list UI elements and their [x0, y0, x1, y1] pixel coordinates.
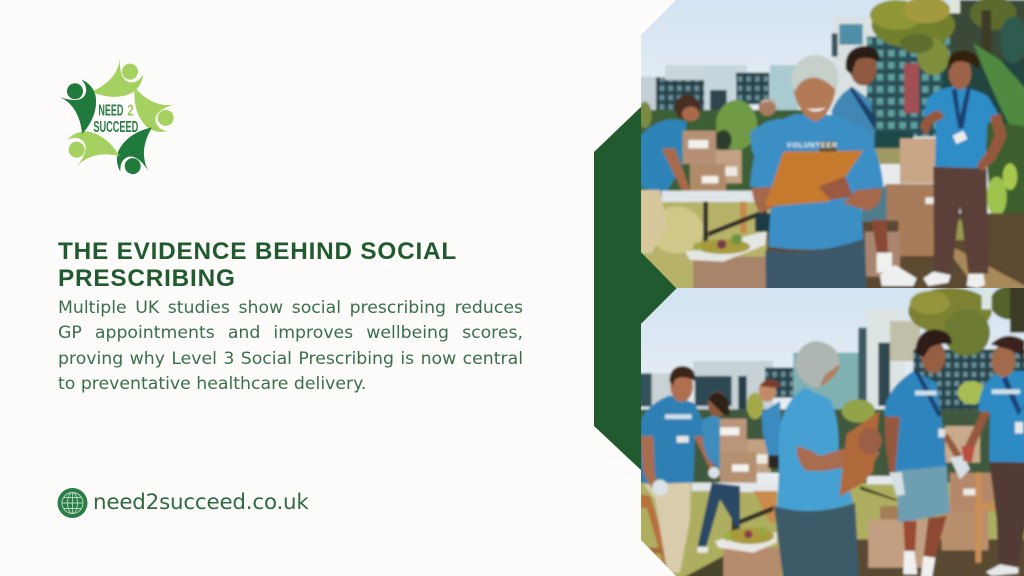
far right man — [978, 371, 1024, 463]
left man — [641, 395, 703, 484]
photo: volunteer with clipboard — [637, 0, 1024, 293]
logo: Need 2 Succeed — [50, 58, 182, 185]
logo wordmark: SUCCEED — [93, 119, 138, 136]
right man — [884, 371, 947, 473]
body text: proving why Level 3 Social Prescribing is now central — [58, 349, 523, 369]
title — [58, 238, 457, 292]
logo wordmark — [93, 103, 138, 136]
photo: volunteers talking at table — [637, 286, 1024, 576]
website url: need2succeed.co.uk — [93, 490, 309, 515]
body text: to preventative healthcare delivery. — [58, 374, 366, 394]
logo figure: lower left — [58, 121, 122, 183]
fruit box — [693, 257, 767, 293]
background worker — [750, 118, 780, 160]
main woman — [750, 114, 883, 250]
title: THE EVIDENCE BEHIND SOCIAL — [58, 238, 457, 265]
photo: volunteer with clipboard: VOLUNTEER — [787, 141, 838, 150]
right tables and boxes — [878, 162, 902, 170]
logo figure: left — [50, 74, 103, 136]
panel: green chevron shape — [594, 107, 677, 470]
girl background — [762, 401, 783, 456]
body text — [58, 298, 523, 394]
logo figure: bottom — [107, 123, 172, 185]
logo figure: top — [92, 58, 143, 97]
foliage — [908, 288, 992, 334]
chair — [641, 494, 668, 567]
title: PRESCRIBING — [58, 265, 236, 292]
grey-haired woman — [777, 388, 853, 512]
fruit box — [723, 548, 782, 576]
logo figure: right — [130, 77, 182, 138]
icon: globe — [58, 488, 88, 518]
table — [662, 191, 755, 202]
foliage — [870, 12, 956, 48]
second man — [830, 86, 876, 147]
body text: Multiple UK studies show social prescribing reduces — [58, 298, 523, 318]
logo wordmark: NEED — [98, 103, 123, 120]
boxes — [715, 150, 742, 183]
woman behind — [702, 415, 720, 469]
third man — [923, 87, 1001, 168]
right chair — [975, 473, 981, 563]
left worker — [637, 119, 687, 197]
logo wordmark: 2 — [127, 103, 134, 120]
body text: GP appointments and improves wellbeing scores, — [58, 323, 523, 343]
boxes — [747, 439, 771, 473]
